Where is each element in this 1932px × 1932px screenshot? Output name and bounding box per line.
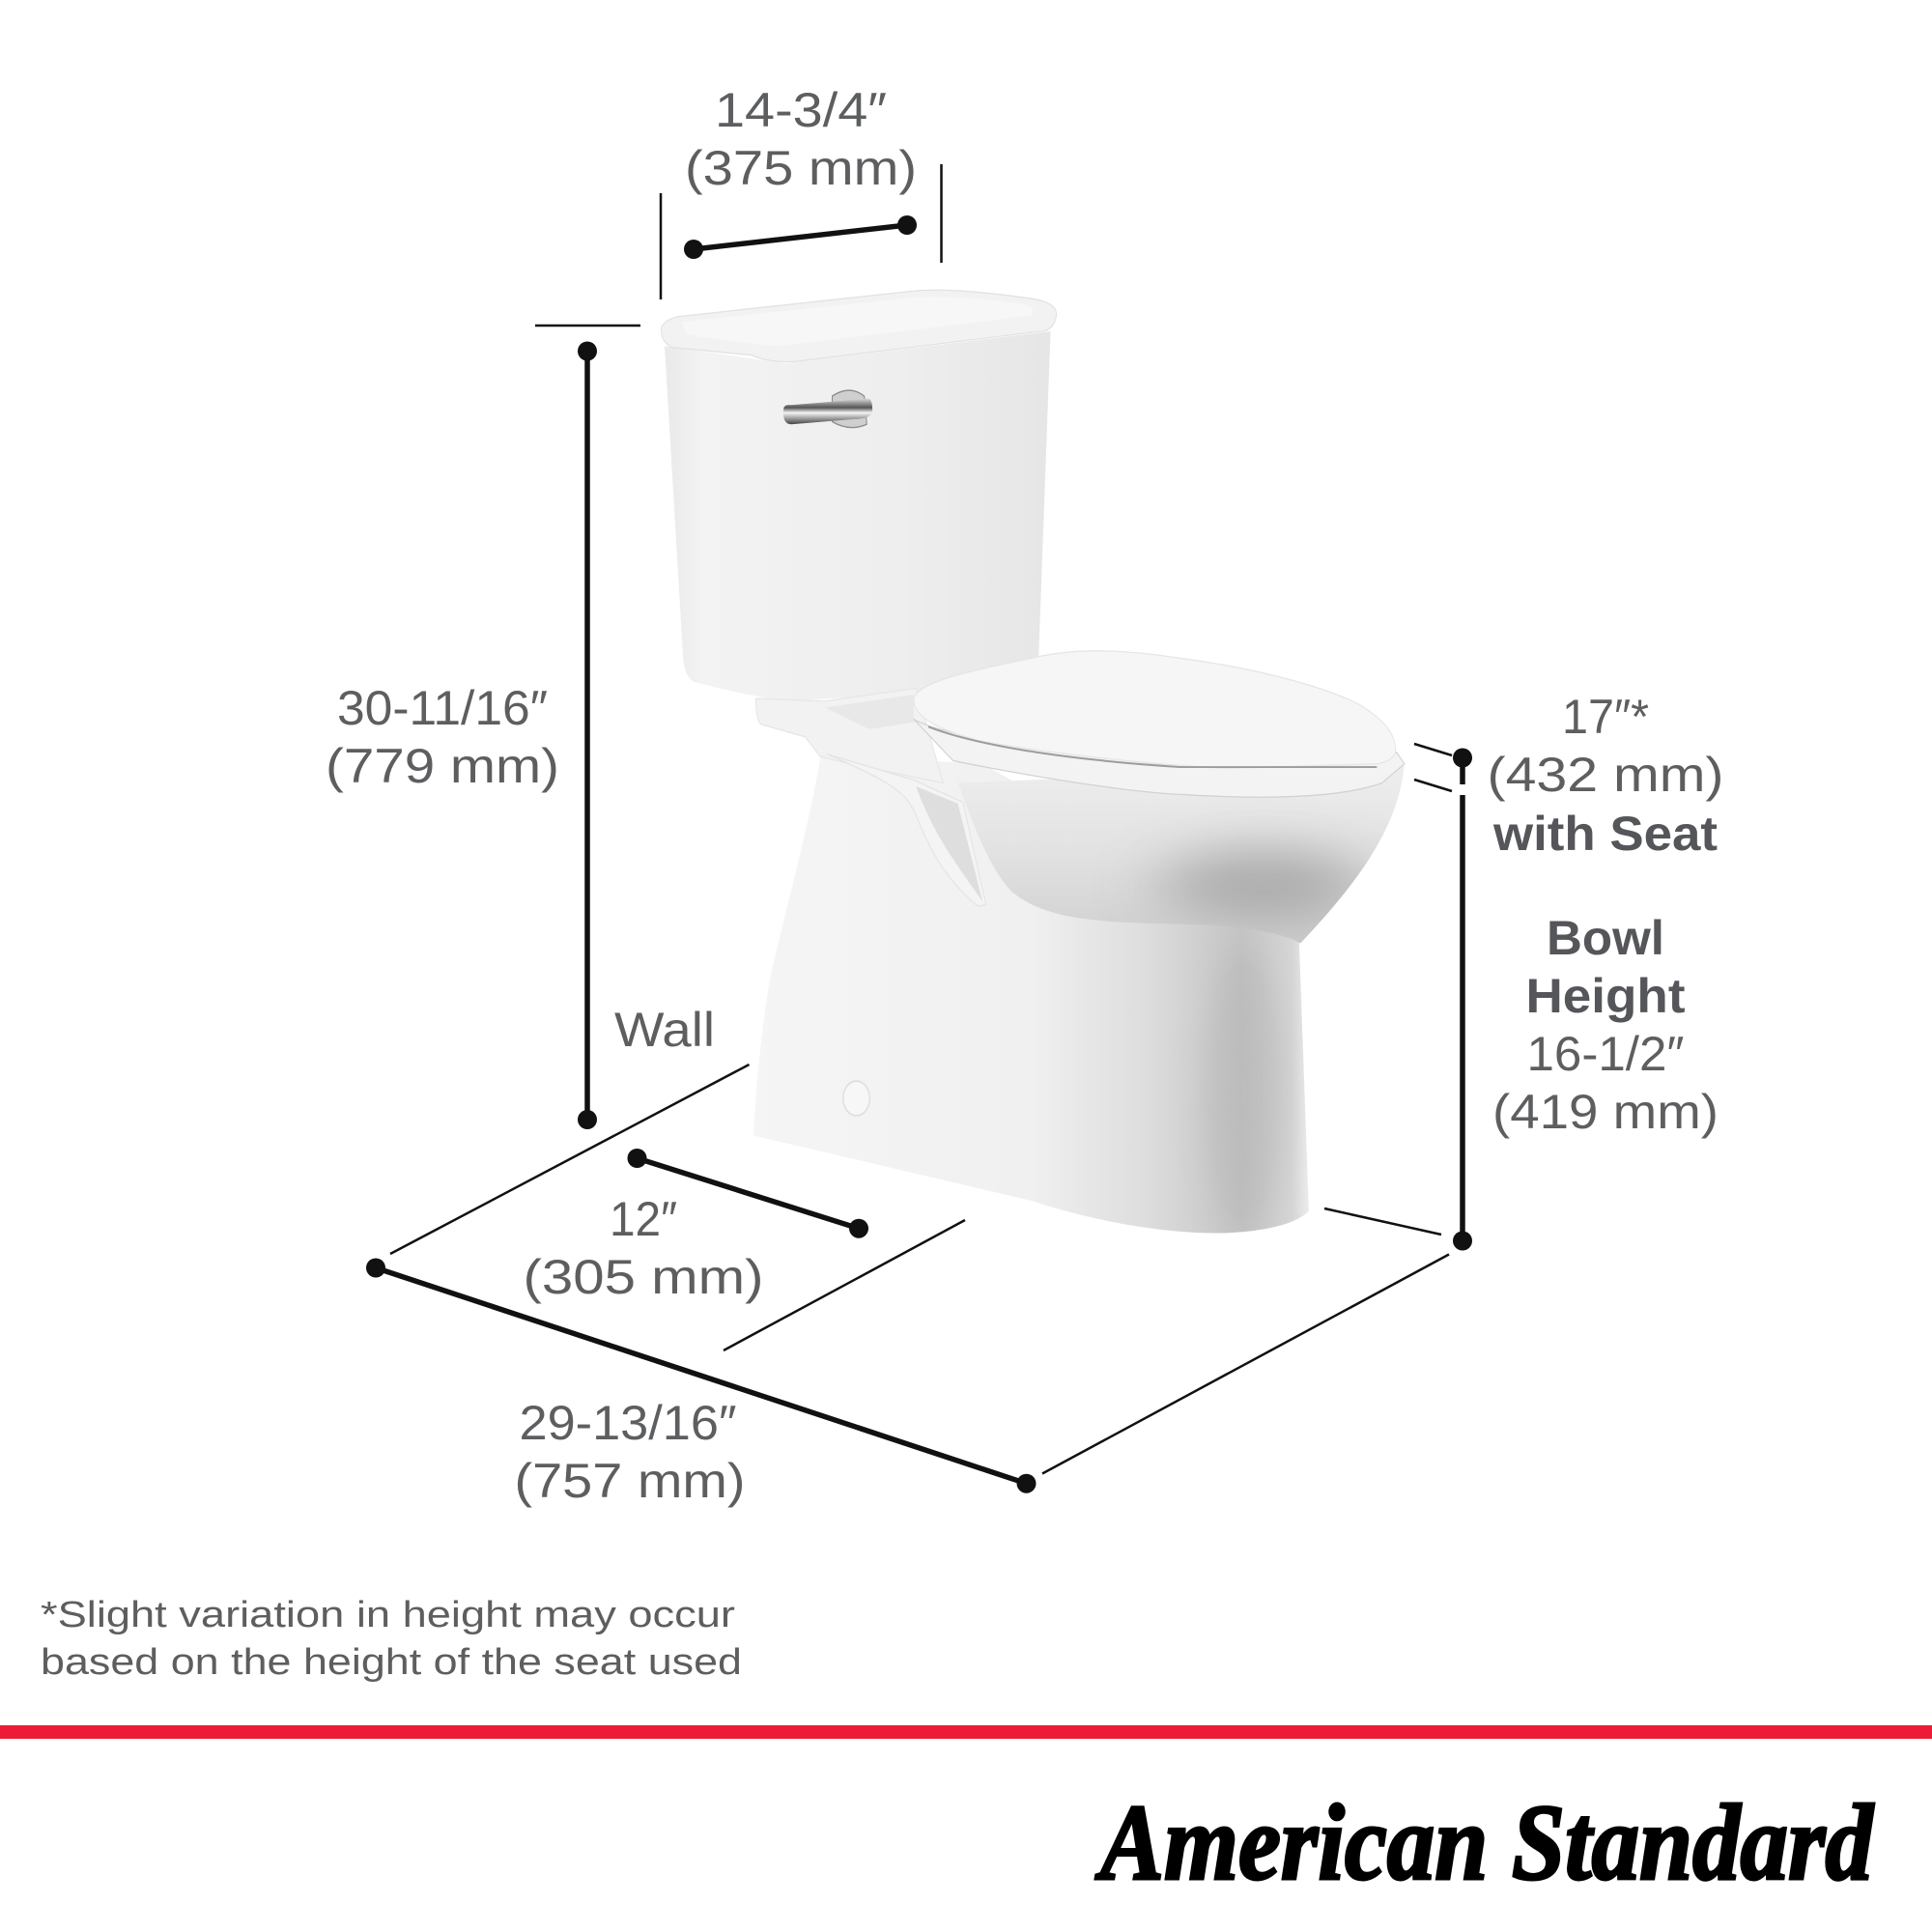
bowl xyxy=(958,764,1405,943)
bowl height label: Bowl xyxy=(1547,911,1664,965)
seat height label: with Seat xyxy=(1492,807,1718,861)
label: (779 mm) xyxy=(326,739,559,793)
overall height dimension xyxy=(326,326,640,1129)
toilet pedestal xyxy=(753,754,1309,1234)
red divider band xyxy=(0,1725,1932,1739)
top tick xyxy=(535,325,640,327)
rough-in dimension xyxy=(390,1065,965,1350)
pedestal arch cut-out xyxy=(827,754,986,906)
label: (757 mm) xyxy=(514,1454,746,1508)
label xyxy=(514,1396,746,1508)
seat height label: (432 mm) xyxy=(1488,748,1723,802)
label xyxy=(326,681,559,793)
bowl and seat height dimension xyxy=(1324,690,1723,1250)
footnote: based on the height of the seat used xyxy=(41,1642,742,1683)
label: (305 mm) xyxy=(524,1250,763,1304)
wall label: Wall xyxy=(614,1003,715,1057)
dimension arrow xyxy=(684,215,917,259)
seat height label: 17″* xyxy=(1562,690,1649,744)
toilet product image xyxy=(661,290,1405,1234)
tank width dimension xyxy=(661,83,941,299)
label: 14-3/4″ xyxy=(715,83,887,137)
label xyxy=(685,83,917,195)
label: 29-13/16″ xyxy=(520,1396,736,1450)
dimension arrow xyxy=(628,1149,868,1238)
bowl height label xyxy=(1492,911,1719,1139)
footnote: *Slight variation in height may occur xyxy=(41,1595,735,1635)
bowl height label: Height xyxy=(1526,969,1686,1023)
footnote xyxy=(41,1595,742,1683)
seat height arrow xyxy=(1453,748,1472,784)
overall depth dimension xyxy=(366,1254,1449,1508)
reference ticks xyxy=(1324,744,1452,1235)
bowl height label: (419 mm) xyxy=(1492,1085,1719,1139)
dimension arrow xyxy=(366,1258,1036,1493)
dimension arrow xyxy=(578,342,597,1129)
toilet tank xyxy=(665,331,1051,701)
label: 30-11/16″ xyxy=(337,681,548,735)
label xyxy=(524,1192,763,1304)
toilet seat lid xyxy=(914,651,1396,768)
reference line xyxy=(1042,1254,1449,1474)
label: 12″ xyxy=(610,1192,677,1246)
bowl rim xyxy=(914,719,1405,797)
bowl neck and deck xyxy=(755,688,943,783)
flush handle xyxy=(783,390,872,428)
tank lid xyxy=(661,290,1057,362)
bowl height arrow xyxy=(1453,795,1472,1250)
bowl height label: 16-1/2″ xyxy=(1526,1027,1685,1081)
wall reference lines xyxy=(390,1065,965,1350)
seat height label xyxy=(1488,690,1723,861)
label: (375 mm) xyxy=(685,141,917,195)
extension lines xyxy=(661,164,941,299)
